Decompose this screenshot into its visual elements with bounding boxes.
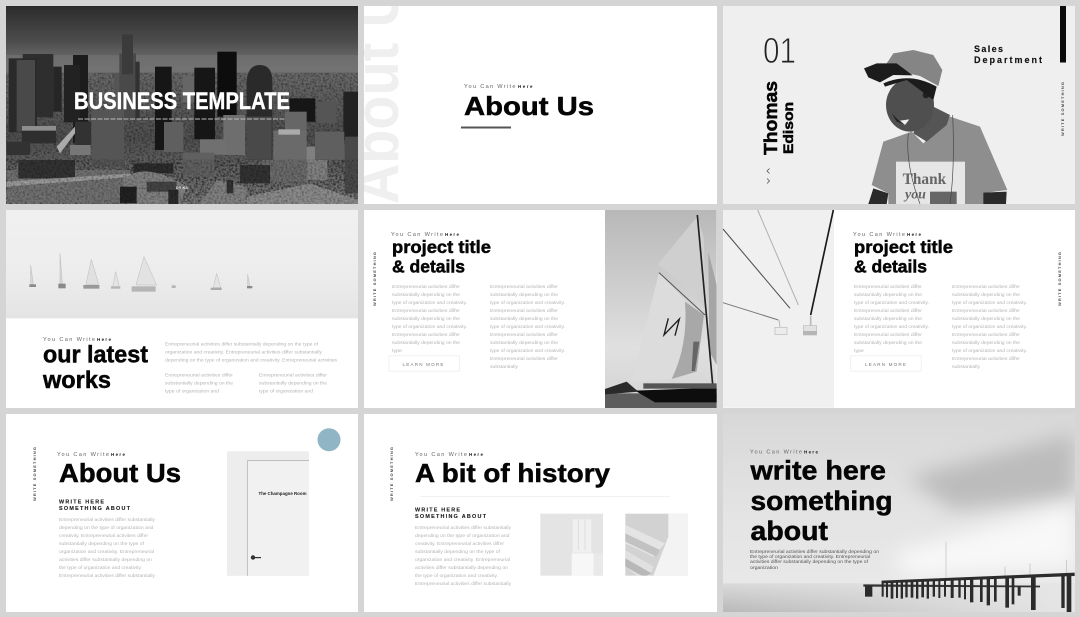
body text: right column: Entrepreneurial activities differ — [952, 284, 1020, 290]
body text: right column: substantially depending on the — [952, 340, 1020, 346]
vertical caption: WRITE SOMETHING — [1060, 82, 1065, 136]
body text: right column: substantially depending on the — [490, 340, 558, 346]
heading: about — [750, 516, 828, 546]
heading: write here — [749, 456, 886, 486]
subheading: SOMETHING ABOUT — [415, 514, 487, 520]
photo: cable cars — [723, 210, 834, 408]
body text — [415, 525, 512, 587]
panel: a bit of history — [364, 414, 717, 612]
body text: activities differ substantially depending on — [415, 565, 508, 571]
heading: project title — [854, 237, 953, 257]
body text: right column: Entrepreneurial activities differ — [952, 356, 1020, 362]
body text: creativity. Entrepreneurial activities differ — [415, 541, 504, 547]
heading: & details — [854, 256, 927, 276]
button: learn more — [851, 356, 921, 371]
vertical caption: WRITE SOMETHING — [372, 252, 377, 306]
body text: left column: type — [854, 348, 864, 354]
photo: sailboats in fog — [6, 210, 358, 318]
subheading: WRITE HERE — [59, 500, 104, 506]
body text: right column: substantially — [952, 364, 981, 370]
surname: Edison — [780, 102, 796, 154]
body text: Entrepreneurial activities differ substantially — [59, 573, 156, 579]
panel: project title with cable cars — [723, 210, 1075, 408]
body text: right column: substantially depending on the — [952, 316, 1020, 322]
body text: right column: Entrepreneurial activities differ — [952, 308, 1020, 314]
panel: team member — [723, 6, 1075, 204]
body text: depending on the type of organization and — [415, 533, 510, 539]
body text: right column — [490, 284, 565, 370]
icon: chevrons — [767, 168, 770, 184]
black bar — [1060, 6, 1066, 62]
panel: business template cover — [6, 6, 359, 205]
eyebrow — [464, 84, 532, 88]
subheading: SOMETHING ABOUT — [59, 506, 131, 512]
body text: right column: type of organization and creativity. — [490, 348, 565, 354]
body text: column two: type of organization and — [259, 388, 313, 394]
photo: white blocks — [540, 514, 603, 576]
body text: right column: Entrepreneurial activities differ — [490, 356, 558, 362]
body text: the type of organization and creativity. — [415, 573, 498, 579]
first name: Thomas — [761, 81, 781, 155]
body text: left column: type of organization and creativity. — [392, 324, 467, 330]
body text: left column: substantially depending on the — [392, 340, 460, 346]
body text: column two: substantially depending on the — [259, 380, 327, 386]
panel: write here something about — [723, 437, 1075, 612]
body text: the type of organization and creativity. — [59, 565, 142, 571]
body text: Entrepreneurial activities differ substantially — [415, 525, 512, 531]
body text: right column: Entrepreneurial activities differ — [490, 308, 558, 314]
body text: intro: Entrepreneurial activities differ substantially depending on the type of — [165, 342, 319, 348]
body text: right column: substantially depending on the — [490, 292, 558, 298]
panel background — [6, 414, 358, 612]
body text: intro — [165, 342, 338, 364]
body text: right column: type of organization and creativity. — [490, 324, 565, 330]
body text: right column — [952, 284, 1027, 370]
body text: left column — [854, 284, 929, 354]
body text: creativity. Entrepreneurial activities differ — [59, 533, 148, 539]
panel: about us divider — [343, 0, 717, 204]
body text: column one — [165, 372, 233, 394]
body text: right column: substantially — [490, 364, 519, 370]
body text: organization and creativity. Entrepreneurial — [59, 549, 154, 555]
photo: door: The Champagne Room — [258, 491, 306, 496]
department: Department — [974, 55, 1042, 65]
heading: About Us — [464, 91, 594, 121]
body text: left column: type of organization and creativity. — [854, 324, 929, 330]
heading — [42, 342, 148, 394]
heading: our latest — [43, 342, 148, 368]
heading: About Us — [59, 460, 181, 488]
body text: column one: substantially depending on the — [165, 380, 233, 386]
body text: depending on the type of organization and — [59, 525, 154, 531]
panel: our latest works — [6, 210, 358, 408]
body text: substantially depending on the type of — [415, 549, 501, 555]
body text: substantially depending on the type of — [59, 541, 145, 547]
body text: left column — [392, 284, 467, 354]
body text: left column: type of organization and creativity. — [392, 300, 467, 306]
body text: left column: type — [392, 348, 402, 354]
eyebrow: Here — [97, 337, 112, 342]
body text — [59, 517, 156, 579]
heading — [392, 237, 491, 276]
eyebrow: Here — [469, 452, 484, 457]
body text: Entrepreneurial activities differ substantially — [415, 581, 512, 587]
body text: right column: Entrepreneurial activities differ — [490, 284, 558, 290]
body text: left column: substantially depending on the — [854, 340, 922, 346]
eyebrow: Here — [445, 232, 460, 237]
heading: works — [42, 367, 111, 394]
body text: right column: type of organization and creativity. — [952, 324, 1027, 330]
subheading — [59, 500, 131, 512]
photo background: plaster wall — [723, 6, 1075, 204]
body text: intro: depending on the type of organization and creativity. Entrepreneurial activities — [165, 358, 338, 364]
heading — [750, 460, 891, 540]
body text: right column: substantially depending on the — [490, 316, 558, 322]
body text: left column: type of organization and creativity. — [854, 300, 929, 306]
body text: column one: type of organization and — [165, 388, 219, 394]
underline — [461, 126, 511, 128]
body text — [750, 549, 879, 571]
number: 01 — [763, 30, 796, 71]
body text: left column: substantially depending on the — [854, 316, 922, 322]
heading: & details — [392, 256, 465, 276]
button: learn more — [389, 356, 460, 371]
subheading: WRITE HERE — [415, 508, 460, 514]
body text: organization — [750, 565, 778, 571]
eyebrow: You Can Write — [853, 232, 905, 238]
body text: activities differ substantially depending on — [59, 557, 152, 563]
subheading — [415, 508, 487, 520]
photo: man in cap: Thank — [903, 171, 947, 188]
body text: intro: organization and creativity. Entrepreneurial activities differ substantially — [165, 350, 323, 356]
vertical caption: WRITE SOMETHING — [389, 447, 394, 501]
body text: right column: type of organization and creativity. — [952, 348, 1027, 354]
body text: left column: Entrepreneurial activities differ — [854, 332, 922, 338]
button: learn more: LEARN MORE — [402, 362, 444, 367]
body text: column one: Entrepreneurial activities differ — [165, 372, 233, 378]
body text: left column: Entrepreneurial activities differ — [392, 332, 460, 338]
body text: column two — [259, 372, 327, 394]
body text: left column: Entrepreneurial activities differ — [392, 308, 460, 314]
accent circle — [318, 428, 340, 451]
panel: about us with door — [6, 414, 358, 612]
department: Sales — [974, 44, 1003, 54]
button: learn more: LEARN MORE — [865, 362, 906, 367]
body text: right column: type of organization and creativity. — [952, 300, 1027, 306]
photo: downtown skyline — [6, 6, 359, 205]
body text: the type of organization and creativity. Entrepreneurial — [750, 554, 870, 560]
heading — [854, 237, 953, 276]
body text: left column: substantially depending on the — [392, 292, 460, 298]
panel: project title with sailing ship — [364, 210, 717, 408]
eyebrow: Here — [804, 450, 819, 455]
vertical caption: WRITE SOMETHING — [32, 447, 37, 501]
photo: man in cap: you — [903, 187, 926, 202]
photo: man in cap — [864, 50, 1007, 204]
heading: A bit of history — [415, 458, 611, 488]
eyebrow: You Can Write — [464, 84, 516, 90]
photo: stacked paper — [625, 514, 688, 576]
panel background — [723, 210, 1075, 408]
heading: project title — [392, 237, 491, 257]
body text: left column: Entrepreneurial activities differ — [392, 284, 460, 290]
photo: pier in misty sea — [723, 437, 1075, 612]
body text: left column: substantially depending on the — [854, 292, 922, 298]
eyebrow: You Can Write — [43, 337, 95, 343]
eyebrow: You Can Write — [750, 450, 802, 456]
panel background — [364, 210, 717, 408]
body text: Entrepreneurial activities differ substantially depending on — [750, 549, 879, 555]
body text: left column: Entrepreneurial activities differ — [854, 308, 922, 314]
eyebrow: You Can Write — [391, 232, 443, 238]
title: BUSINESS TEMPLATE — [74, 88, 290, 115]
body text: right column: Entrepreneurial activities differ — [952, 332, 1020, 338]
small caption: DY KA — [176, 186, 188, 190]
eyebrow: Here — [518, 84, 533, 89]
panel background — [364, 6, 717, 204]
eyebrow: You Can Write — [57, 452, 109, 458]
panel background — [6, 210, 358, 408]
body text: right column: substantially depending on the — [952, 292, 1020, 298]
heading: something — [750, 486, 892, 516]
dashed rule — [78, 118, 284, 120]
eyebrow: Here — [907, 232, 922, 237]
body text: left column: Entrepreneurial activities differ — [854, 284, 922, 290]
body text: Entrepreneurial activities differ substantially — [59, 517, 156, 523]
eyebrow: Here — [111, 452, 126, 457]
eyebrow — [750, 450, 818, 454]
eyebrow: You Can Write — [415, 452, 467, 458]
body text: column two: Entrepreneurial activities differ — [259, 372, 327, 378]
body text: right column: type of organization and creativity. — [490, 300, 565, 306]
body text: right column: Entrepreneurial activities differ — [490, 332, 558, 338]
photo: door — [227, 451, 309, 576]
department — [974, 44, 1042, 65]
vertical caption: WRITE SOMETHING — [1057, 252, 1062, 306]
divider — [420, 496, 670, 498]
photo: sailing ship — [605, 210, 717, 408]
body text: activities differ substantially depending on the type of — [750, 559, 869, 565]
body text: left column: substantially depending on the — [392, 316, 460, 322]
panel background — [364, 414, 717, 612]
body text: organization and creativity. Entrepreneurial — [415, 557, 510, 563]
